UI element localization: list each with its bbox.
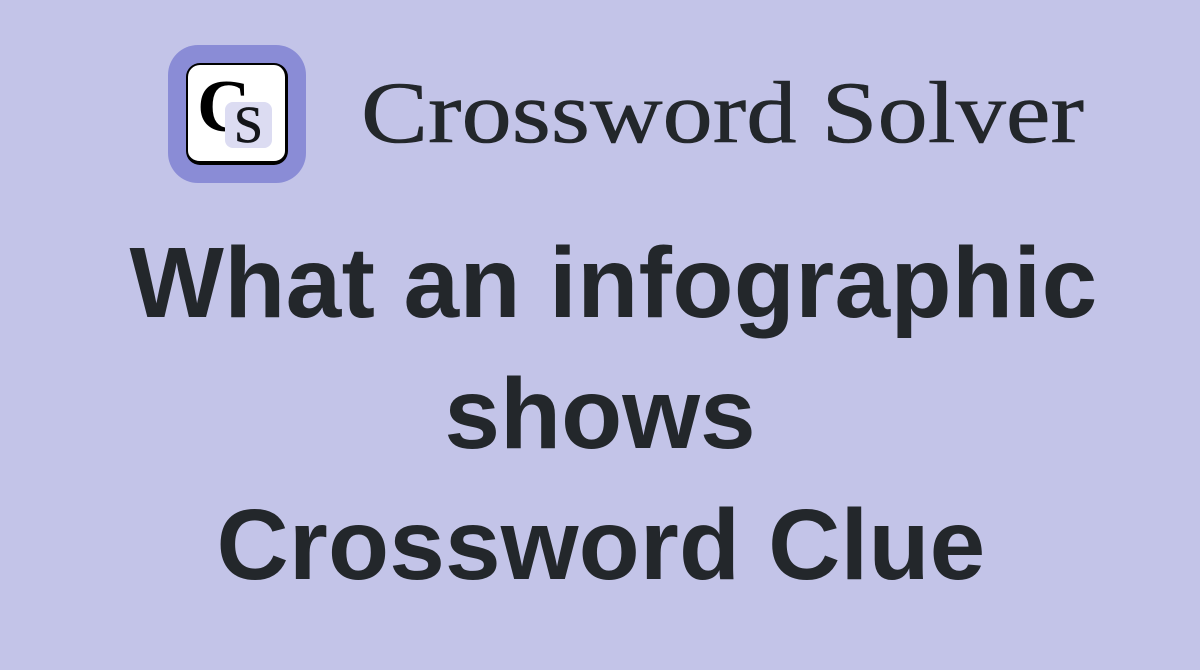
icon: white logo tile <box>186 63 288 165</box>
title <box>129 227 1098 601</box>
title line 3: Crossword Clue <box>217 489 985 601</box>
icon: letter S badge: S <box>234 97 263 154</box>
title line 2: shows <box>444 358 756 470</box>
icon: letter S badge <box>225 102 272 148</box>
title line 1: What an infographic <box>129 227 1098 339</box>
icon: letter C: C <box>197 66 250 148</box>
icon: Crossword Solver logo <box>168 45 306 183</box>
site name: Crossword Solver <box>361 65 1084 162</box>
